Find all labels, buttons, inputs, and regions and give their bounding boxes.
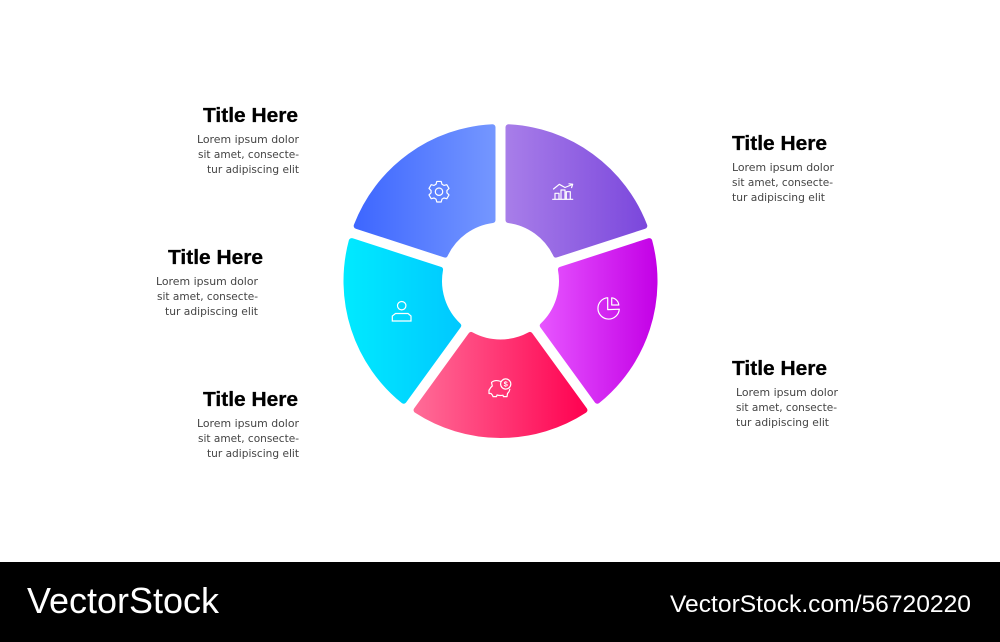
footer url: VectorStock.com/56720220 (670, 591, 971, 618)
segment: magenta analytics (543, 241, 655, 401)
body text: sit amet, consecte- (732, 177, 833, 189)
body text: Lorem ipsum dolor (736, 387, 839, 399)
text block: lower right (732, 358, 839, 429)
body text: tur adipiscing elit (732, 192, 825, 204)
body text: tur adipiscing elit (207, 164, 299, 176)
text block: upper right (732, 133, 835, 204)
body text (156, 276, 259, 318)
icon: pie chart (598, 298, 619, 319)
panel: ring diagram (346, 127, 655, 435)
footer bar (0, 562, 1000, 642)
body text: tur adipiscing elit (207, 448, 299, 460)
text block: middle left (156, 247, 263, 318)
heading: Title Here (203, 105, 298, 127)
heading: Title Here (168, 247, 263, 269)
body text (197, 418, 300, 460)
icon: person (392, 302, 411, 321)
segment: purple growth (508, 127, 644, 255)
segment: pink savings (417, 335, 584, 435)
icon: piggy bank with coin: $ (504, 380, 509, 389)
text block: upper left (197, 105, 300, 176)
body text (732, 162, 835, 204)
body text: sit amet, consecte- (198, 149, 299, 161)
heading: Title Here (732, 133, 827, 155)
icon: piggy bank with coin (489, 379, 511, 397)
icon: gear (429, 181, 449, 202)
body text: Lorem ipsum dolor (197, 418, 300, 430)
body text: tur adipiscing elit (736, 417, 829, 429)
body text (736, 387, 839, 429)
body text: Lorem ipsum dolor (156, 276, 259, 288)
text block: lower left (197, 389, 300, 460)
body text: Lorem ipsum dolor (197, 134, 300, 146)
heading: Title Here (203, 389, 298, 411)
body text (197, 134, 300, 176)
body text: sit amet, consecte- (736, 402, 837, 414)
body text: sit amet, consecte- (157, 291, 258, 303)
body text: tur adipiscing elit (165, 306, 258, 318)
segment: blue settings (357, 127, 492, 255)
footer logo text: VectorStock (27, 580, 220, 621)
body text: Lorem ipsum dolor (732, 162, 835, 174)
heading: Title Here (732, 358, 827, 380)
body text: sit amet, consecte- (198, 433, 299, 445)
icon: bar chart with arrow (553, 184, 573, 199)
segment: cyan user (346, 241, 458, 401)
